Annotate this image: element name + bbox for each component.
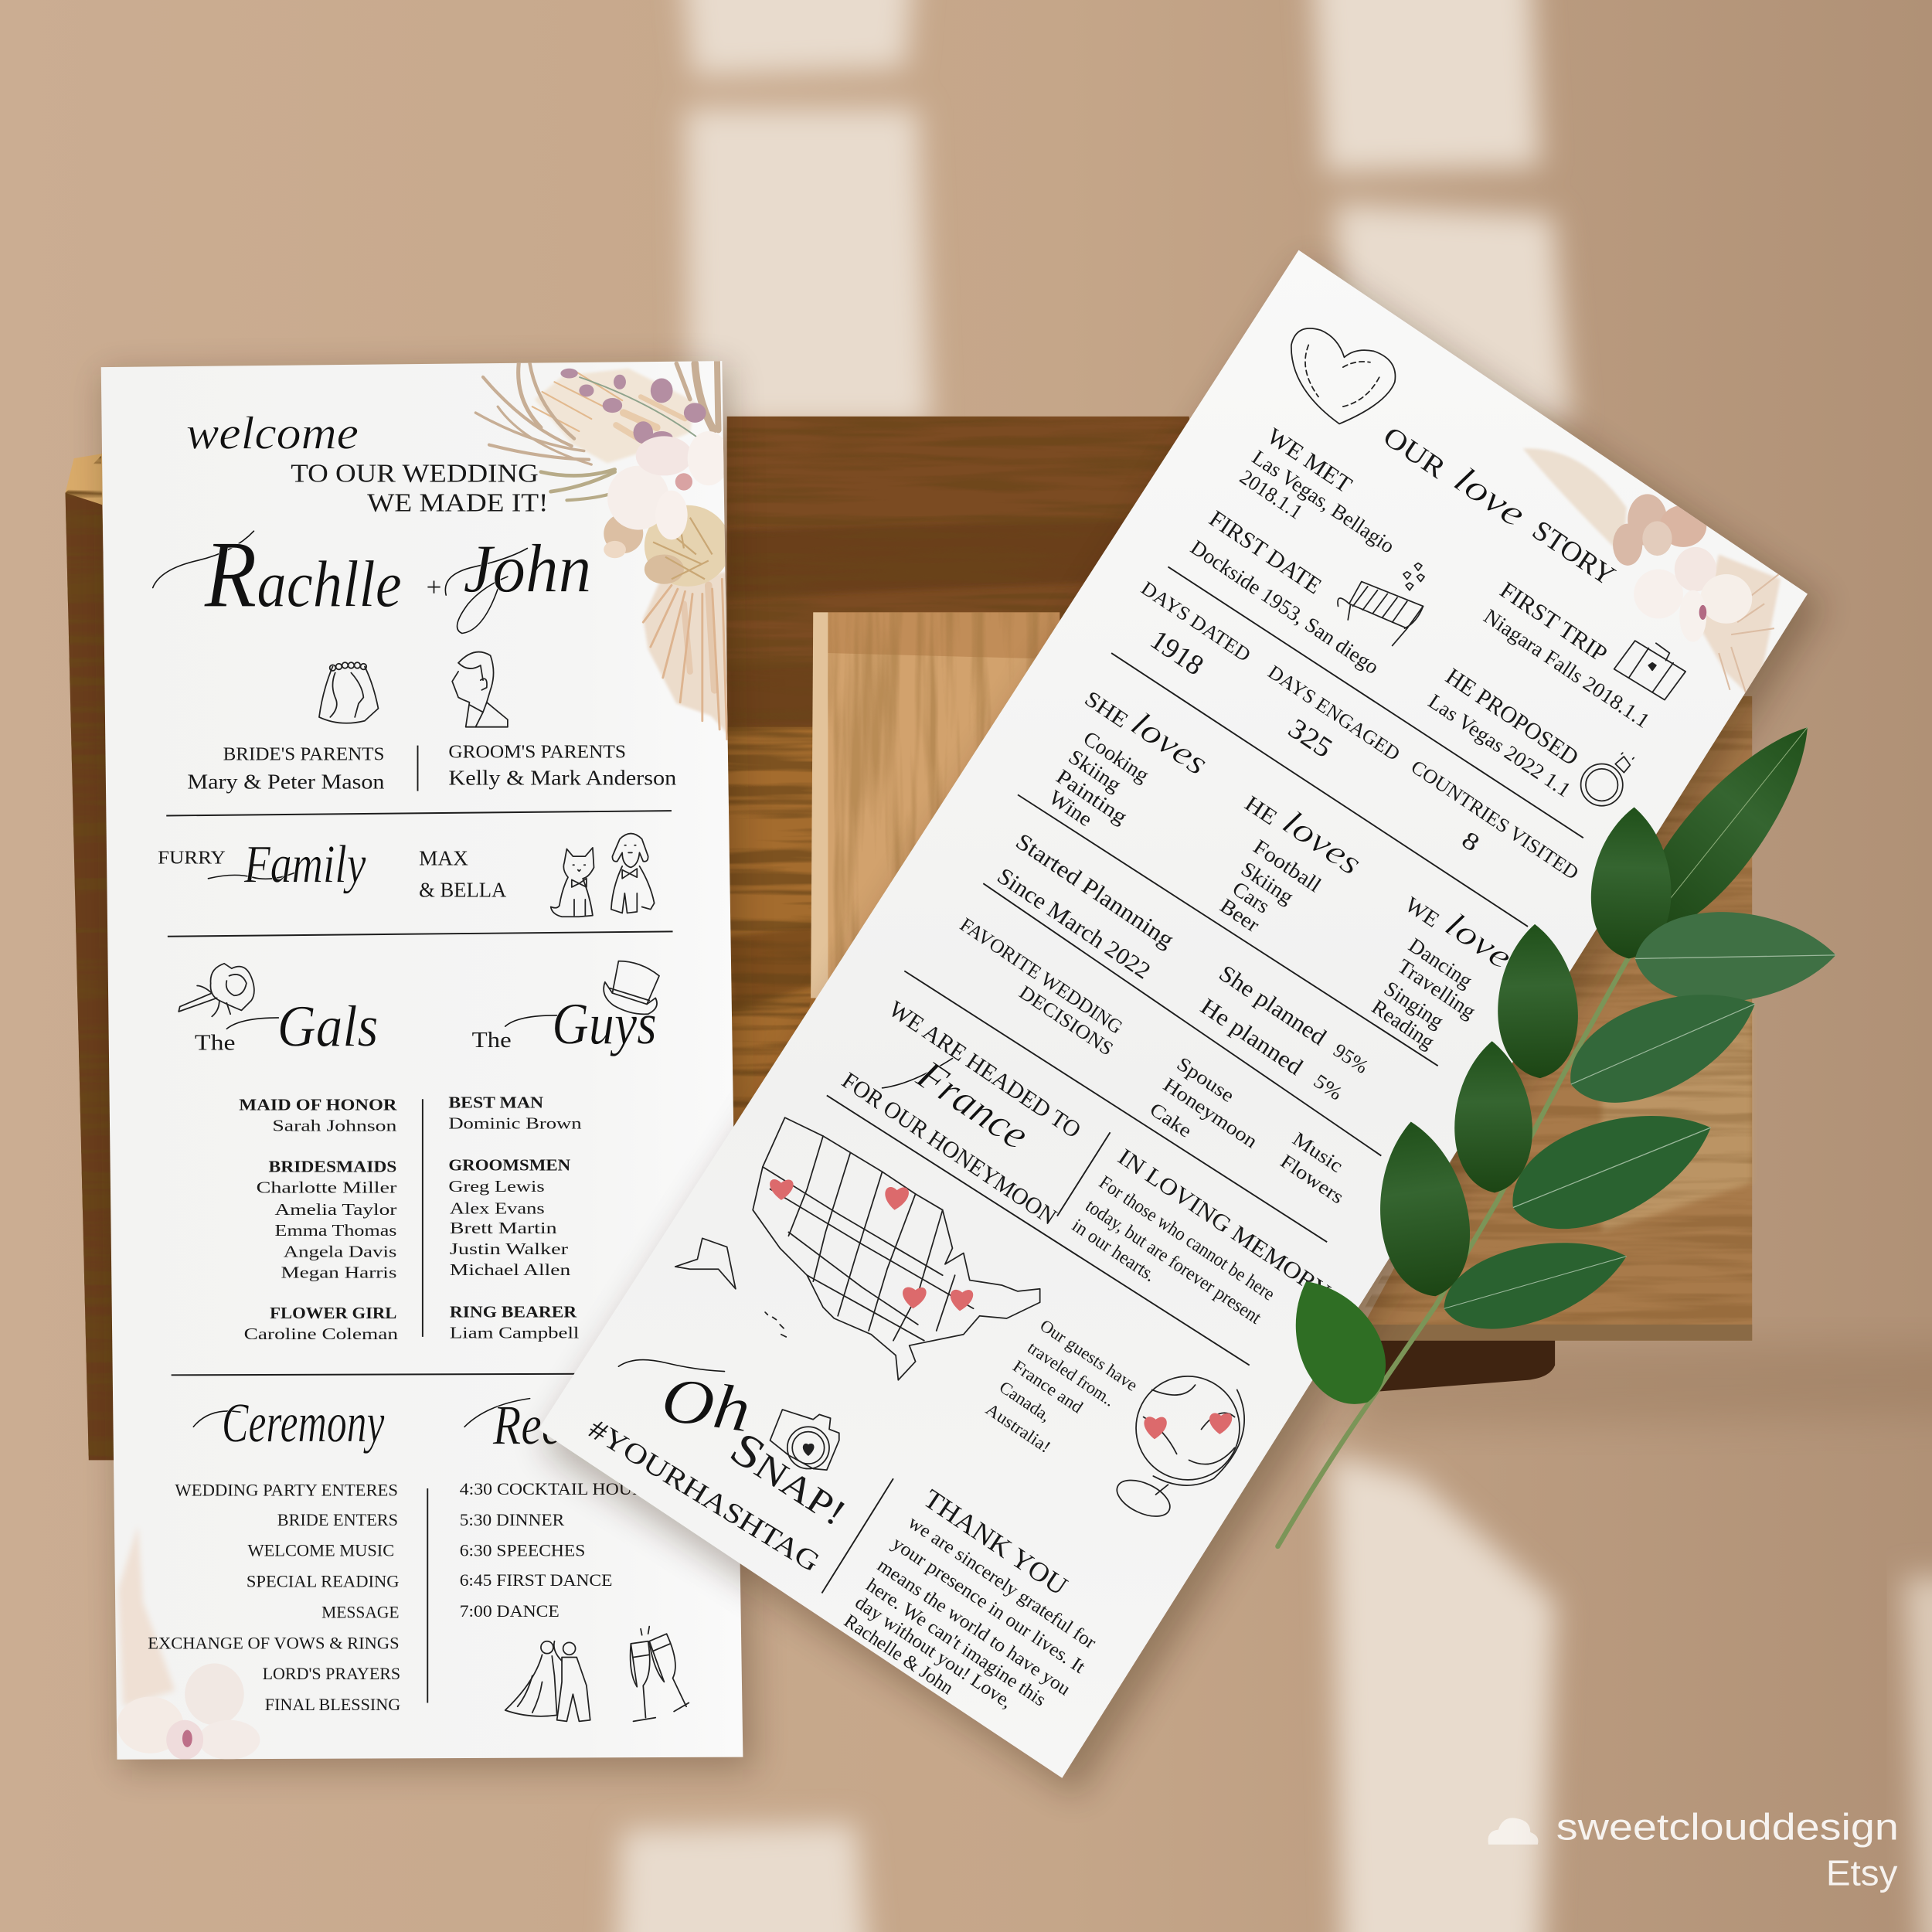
text: thank you note: we are sincerely grateful for — [904, 1512, 1100, 1654]
icon: champagne flutes — [631, 1627, 689, 1721]
watermark: sweetclouddesign Etsy — [1488, 1807, 1899, 1893]
text: parents: Mary & Peter Mason — [187, 770, 384, 794]
text: honeymoon destination: WE ARE HEADED TO — [884, 995, 1086, 1144]
icon: groom profile — [452, 652, 508, 727]
illustration: green leafy branch — [1270, 704, 1837, 1546]
heading: ceremony and reception — [193, 1391, 678, 1457]
text: furry family: FURRY — [158, 848, 226, 869]
list: he loves: Beer — [1216, 894, 1264, 937]
text: furry family: MAX — [419, 846, 468, 870]
list: bridesmaids column — [239, 1096, 398, 1343]
list: groomsmen column: Dominic Brown — [448, 1114, 582, 1132]
text: parents — [187, 742, 676, 794]
text: first trip: Niagara Falls 2018.1.1 — [1480, 604, 1654, 733]
wooden board, dark — [62, 417, 1232, 1464]
text: favorite wedding decisions — [956, 913, 1349, 1208]
text: parents: Kelly & Mark Anderson — [448, 767, 676, 791]
text: first trip: FIRST TRIP — [1495, 577, 1612, 667]
list: bridesmaids column: Amelia Taylor — [275, 1200, 396, 1219]
list: we love: WE — [1400, 892, 1444, 933]
heading: oh snap — [618, 1360, 858, 1536]
list: he loves: Cars — [1228, 876, 1274, 918]
list: she loves: loves — [1124, 704, 1216, 783]
text: guests traveled from: Australia! — [982, 1400, 1054, 1457]
heading: oh snap: SNAP! — [721, 1422, 858, 1536]
list: ceremony order — [148, 1481, 400, 1714]
illustration: orchid and pampas bottom left — [117, 1526, 260, 1760]
text: furry family: Family — [243, 835, 366, 895]
title: couple names: Rachlle — [204, 520, 402, 627]
text: in loving memory: For those who cannot be here — [1095, 1172, 1278, 1305]
list: groomsmen column: GROOMSMEN — [448, 1156, 571, 1175]
text: in loving memory: in our hearts. — [1068, 1215, 1159, 1286]
icon: dog with bow tie — [611, 834, 655, 913]
heading: ceremony and reception: Ceremony — [222, 1391, 385, 1454]
title: couple names: John — [463, 530, 591, 607]
heading: the guys: The — [472, 1028, 512, 1053]
list: bridesmaids column: Charlotte Miller — [257, 1178, 396, 1196]
list: reception timeline — [460, 1479, 645, 1621]
list: groomsmen column: BEST MAN — [448, 1093, 544, 1111]
heading: ceremony and reception: Reception — [492, 1394, 678, 1457]
text: favorite wedding decisions: Flowers — [1277, 1150, 1349, 1208]
icon: diamond ring — [1581, 753, 1634, 806]
list: groomsmen column: RING BEARER — [450, 1302, 577, 1321]
title: couple names — [153, 520, 591, 634]
icon: park bench with hearts — [1338, 563, 1424, 645]
text: first date: Dockside 1953, San diego — [1186, 536, 1383, 679]
list: ceremony order: EXCHANGE OF VOWS & RINGS — [148, 1633, 400, 1652]
list: we love: love — [1438, 905, 1519, 977]
list: groomsmen column: Justin Walker — [450, 1240, 568, 1258]
panel: right card shadow — [543, 261, 1824, 1797]
list: bridesmaids column: MAID OF HONOR — [239, 1096, 397, 1114]
list: bridesmaids column: Angela Davis — [284, 1242, 396, 1260]
text: thank you note: day without you! Love, — [852, 1592, 1016, 1713]
heading: our love story: STORY — [1527, 514, 1621, 591]
text: parents: BRIDE'S PARENTS — [223, 744, 384, 765]
heading: the guys — [472, 991, 657, 1056]
text: guests traveled from: traveled from.. — [1024, 1338, 1119, 1410]
stat: countries visited: COUNTRIES VISITED — [1407, 755, 1583, 884]
text: thank you note: Rachelle & John — [840, 1611, 957, 1699]
panel: right love story card — [539, 250, 1808, 1778]
list: reception timeline: 7:00 DANCE — [460, 1601, 560, 1621]
list: he loves: Football — [1250, 835, 1325, 896]
list: reception timeline: 6:45 FIRST DANCE — [460, 1570, 612, 1590]
text: favorite wedding decisions: Honeymoon — [1159, 1073, 1262, 1152]
text: welcome heading: welcome — [186, 407, 359, 459]
icon: dancing couple — [505, 1641, 590, 1721]
watermark: sweetclouddesign Etsy: Etsy — [1826, 1852, 1898, 1893]
icon: heart of leaves — [1291, 328, 1395, 423]
icon: cat with bow tie — [551, 848, 594, 917]
text: we met: WE MET — [1263, 423, 1357, 498]
heading: our love story: love — [1447, 458, 1533, 536]
list: ceremony order: BRIDE ENTERS — [277, 1510, 398, 1529]
list: ceremony order: LORD'S PRAYERS — [263, 1664, 400, 1683]
text: we met: Las Vegas, Bellagio — [1248, 445, 1399, 558]
text: guests traveled from — [982, 1315, 1141, 1457]
text: favorite wedding decisions: Cake — [1146, 1098, 1196, 1142]
text: welcome heading: TO OUR WEDDING — [291, 459, 539, 488]
icon: globe with hearts — [1111, 1376, 1244, 1524]
text: he proposed: HE PROPOSED — [1441, 663, 1583, 770]
list: ceremony order: MESSAGE — [321, 1602, 400, 1621]
text: guests traveled from: Canada, — [996, 1377, 1055, 1426]
text: favorite wedding decisions: DECISIONS — [1015, 981, 1117, 1060]
list: we love — [1368, 892, 1519, 1053]
text: hashtag: #YOURHASHTAG — [583, 1413, 825, 1578]
text: started planning: Started Plannning — [1011, 828, 1179, 953]
list: reception timeline: 6:30 SPEECHES — [460, 1541, 585, 1560]
list: bridesmaids column: Emma Thomas — [275, 1221, 396, 1240]
stat: days engaged: 325 — [1283, 712, 1338, 764]
list: ceremony order: WELCOME MUSIC — [247, 1541, 394, 1560]
illustration: orchid and pampas on story card — [1523, 448, 1781, 705]
heading: oh snap: Oh — [657, 1362, 755, 1446]
list: ceremony order: SPECIAL READING — [247, 1572, 400, 1591]
watermark: sweetclouddesign Etsy: sweetclouddesign — [1556, 1807, 1899, 1848]
text: in loving memory: today, but are forever present — [1082, 1196, 1265, 1328]
text: he proposed: Las Vegas 2022 1.1 — [1424, 689, 1575, 801]
list: we love: Travelling — [1393, 954, 1480, 1023]
text: welcome heading: WE MADE IT! — [367, 489, 549, 518]
text: furry family: & BELLA — [419, 879, 506, 903]
list: ceremony order: FINAL BLESSING — [265, 1695, 400, 1714]
text: parents: GROOM'S PARENTS — [448, 742, 626, 763]
stat: countries visited: 8 — [1457, 826, 1485, 857]
text: in loving memory: IN LOVING MEMORY — [1114, 1144, 1335, 1305]
list: bridesmaids column: BRIDESMAIDS — [269, 1157, 396, 1175]
list: she loves: Skiing — [1064, 745, 1126, 797]
list: bridesmaids column: Megan Harris — [281, 1263, 396, 1281]
panel: left program card shadow — [104, 367, 754, 1770]
text: favorite wedding decisions: Music — [1289, 1128, 1347, 1177]
icon: suitcase — [1614, 641, 1685, 700]
heading: our love story: OUR — [1378, 420, 1452, 485]
list: we love: Reading — [1368, 995, 1439, 1053]
list: bridesmaids column: Caroline Coleman — [244, 1325, 398, 1343]
heading: the guys: Guys — [552, 991, 657, 1056]
panel: left wedding program card — [101, 361, 743, 1760]
text: guests traveled from: France and — [1009, 1356, 1087, 1417]
wooden board, light — [811, 612, 1752, 1393]
stat: who planned: 95% — [1329, 1039, 1372, 1078]
list: he loves: Skiing — [1237, 857, 1298, 909]
list: ceremony order: WEDDING PARTY ENTERES — [175, 1481, 398, 1500]
text: favorite wedding decisions: FAVORITE WEDDING — [956, 913, 1127, 1039]
stat: days dated: DAYS DATED — [1137, 577, 1255, 666]
stat: who planned — [1196, 960, 1372, 1104]
text: started planning — [992, 828, 1179, 984]
text: first date: FIRST DATE — [1205, 505, 1326, 599]
text: welcome heading — [186, 407, 549, 518]
text: thank you note — [840, 1483, 1100, 1713]
title: couple names: + — [427, 573, 441, 603]
list: groomsmen column — [448, 1093, 582, 1342]
list: we love: Dancing — [1404, 934, 1477, 993]
stat: who planned: He planned — [1196, 993, 1308, 1080]
list: she loves: Wine — [1045, 785, 1097, 831]
text: in loving memory — [1068, 1144, 1335, 1328]
text: thank you note: means the world to have you — [873, 1555, 1074, 1700]
chart: map of the United States with hearts — [675, 1117, 1040, 1380]
list: he loves: HE — [1240, 791, 1281, 830]
icon: rose — [179, 964, 254, 1016]
heading: the gals: Gals — [277, 994, 378, 1060]
list: she loves: SHE — [1080, 686, 1133, 733]
stat: days dated: 1918 — [1145, 624, 1209, 682]
text: honeymoon destination: France — [908, 1051, 1037, 1158]
list: groomsmen column: Liam Campbell — [450, 1324, 579, 1342]
list: reception timeline: 5:30 DINNER — [460, 1510, 564, 1529]
list: bridesmaids column: FLOWER GIRL — [270, 1304, 396, 1322]
stat: who planned: She planned — [1214, 960, 1332, 1050]
text: thank you note: your presence in our lives. It — [888, 1533, 1089, 1678]
list: he loves: loves — [1276, 802, 1369, 883]
text: favorite wedding decisions: Spouse — [1173, 1053, 1239, 1107]
text: started planning: Since March 2022 — [992, 862, 1155, 984]
text: thank you note: here. We can't imagine this — [862, 1575, 1049, 1710]
text: honeymoon destination — [837, 995, 1086, 1230]
list: groomsmen column: Brett Martin — [450, 1219, 557, 1237]
list: bridesmaids column: Sarah Johnson — [272, 1117, 397, 1135]
text: we met: 2018.1.1 — [1236, 465, 1307, 524]
list: she loves: Cooking — [1080, 726, 1154, 787]
stat: who planned: 5% — [1310, 1070, 1347, 1104]
text: furry family — [158, 835, 506, 903]
stat: days engaged: DAYS ENGAGED — [1264, 661, 1404, 765]
list: we love: Singing — [1380, 977, 1448, 1033]
text: honeymoon destination: FOR OUR HONEYMOON — [837, 1067, 1062, 1230]
list: reception timeline: 4:30 COCKTAIL HOUR — [460, 1479, 645, 1498]
list: he loves — [1216, 791, 1369, 937]
heading: our love story — [1378, 420, 1621, 591]
illustration: pampas and orchid bouquet top right — [475, 361, 730, 740]
list: she loves — [1045, 686, 1216, 831]
icon: top hat — [604, 961, 659, 1014]
text: guests traveled from: Our guests have — [1036, 1315, 1141, 1395]
icon: bride with veil — [319, 662, 378, 723]
list: groomsmen column: Michael Allen — [450, 1260, 570, 1279]
heading: the gals — [195, 994, 378, 1060]
heading: the gals: The — [195, 1030, 236, 1055]
list: groomsmen column: Alex Evans — [450, 1199, 545, 1217]
list: she loves: Painting — [1052, 764, 1132, 828]
icon: camera — [770, 1410, 839, 1470]
list: groomsmen column: Greg Lewis — [448, 1177, 545, 1196]
text: thank you note: THANK YOU — [918, 1483, 1073, 1601]
